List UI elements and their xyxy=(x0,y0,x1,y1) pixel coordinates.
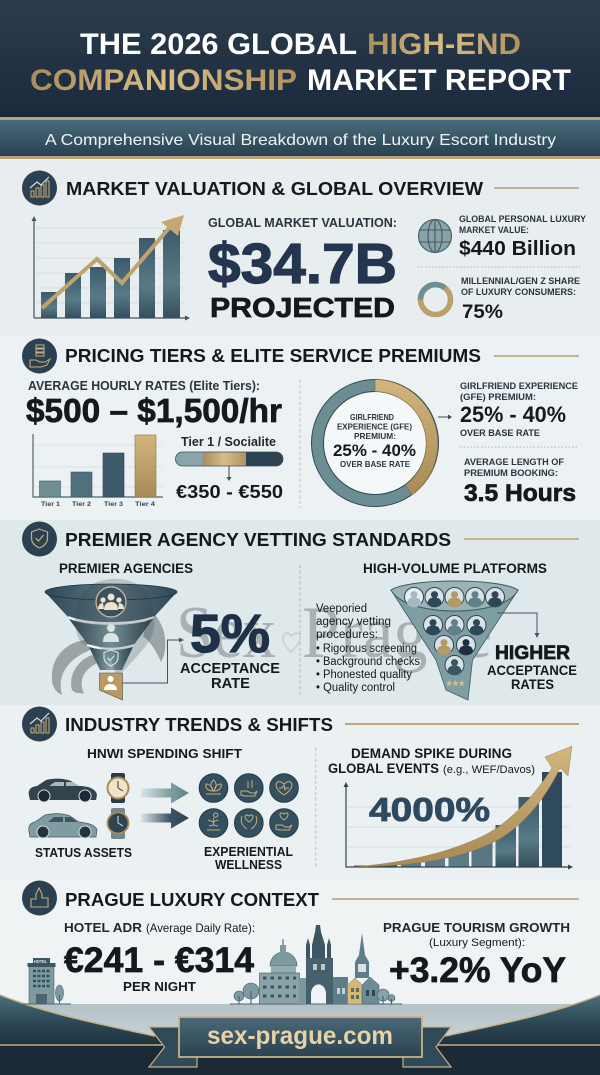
stat: 5% acceptance: 5% xyxy=(190,604,270,664)
label: experiential wellness xyxy=(204,845,293,872)
connector: funnel to 5 percent xyxy=(122,638,184,683)
stat: booking length xyxy=(464,457,576,507)
stat: booking length: 3.5 Hours xyxy=(464,480,576,507)
panel: market valuation xyxy=(22,170,587,323)
stat: global market valuation xyxy=(208,216,397,323)
heading: demand spike xyxy=(328,746,535,776)
icon: hotel: HOTEL xyxy=(34,959,47,964)
heading: PRICING TIERS & ELITE SERVICE PREMIUMS xyxy=(65,345,481,366)
bar chart: tiers xyxy=(33,434,163,508)
stat: global market valuation: PROJECTED xyxy=(210,292,395,323)
icon: growth chart xyxy=(22,170,57,206)
donut chart: GFE premium: PREMIUM: xyxy=(354,431,396,441)
stat: hotel ADR xyxy=(64,921,255,994)
stat: higher acceptance xyxy=(487,643,577,692)
icon: hotel xyxy=(23,958,71,1004)
wellness icons xyxy=(199,774,298,837)
stat: personal luxury market: MARKET VALUE: xyxy=(459,225,529,235)
icon: dark watch xyxy=(108,808,128,839)
stat: personal luxury market: $440 Billion xyxy=(459,238,576,260)
arrow: to wellness, navy xyxy=(141,808,189,828)
heading: MARKET VALUATION & GLOBAL OVERVIEW xyxy=(66,178,484,199)
bar chart: tiers: Tier 3 xyxy=(104,501,123,508)
stat: millennial share: OF LUXURY CONSUMERS: xyxy=(461,287,576,297)
icon: gold watch xyxy=(108,773,128,803)
stat: hotel ADR: PER NIGHT xyxy=(123,979,196,994)
stat: hotel ADR: (Average Daily Rate): xyxy=(146,921,255,935)
title: COMPANIONSHIP xyxy=(30,64,297,97)
stat: booking length: PREMIUM BOOKING: xyxy=(464,468,558,479)
heading: PREMIER AGENCY VETTING STANDARDS xyxy=(65,529,451,550)
vetting procedures list xyxy=(316,603,420,694)
subtitle: A Comprehensive Visual Breakdown of the Luxury Escort Industry xyxy=(45,132,556,149)
heading: demand spike: (e.g., WEF/Davos) xyxy=(443,764,535,776)
title: MARKET REPORT xyxy=(307,64,571,97)
illustration: prague skyline xyxy=(230,925,402,1004)
title: HIGH-END xyxy=(367,28,521,61)
stat: GFE premium: 25% - 40% xyxy=(460,402,566,427)
stat: tourism growth: (Luxury Segment): xyxy=(429,937,525,949)
footer xyxy=(0,995,600,1075)
stat: higher acceptance: ACCEPTANCE xyxy=(487,662,577,678)
mane shadow over funnel xyxy=(75,579,155,680)
arrow: growth xyxy=(42,215,184,308)
watermark: Prague xyxy=(302,592,492,674)
bar chart: market growth xyxy=(32,215,190,320)
title xyxy=(30,28,571,97)
icon: city xyxy=(22,880,57,916)
stat: tourism growth xyxy=(383,920,570,990)
icon: person xyxy=(103,624,119,642)
stat: booking length: AVERAGE LENGTH OF xyxy=(464,457,564,468)
stat: GFE premium: (GFE) PREMIUM: xyxy=(460,392,536,403)
heading: PRAGUE LUXURY CONTEXT xyxy=(65,889,320,910)
stat: millennial share: 75% xyxy=(462,302,503,323)
stat: millennial share xyxy=(461,276,580,323)
tier 1 range bar: Tier 1 / Socialite xyxy=(181,434,276,449)
chart: demand spike xyxy=(344,746,573,870)
avatars xyxy=(404,588,504,675)
stat: personal luxury market xyxy=(459,214,587,260)
watermark: Sex xyxy=(176,592,276,674)
stat: GFE premium: OVER BASE RATE xyxy=(460,428,540,439)
vetting procedures list: agency vetting xyxy=(316,616,391,628)
stat: average hourly rates: AVERAGE HOURLY RATES (Elite Tiers): xyxy=(28,378,260,393)
tier 1 range bar: €350 - €550 xyxy=(176,482,283,502)
stat: tourism growth: PRAGUE TOURISM GROWTH xyxy=(383,920,570,935)
stat: 5% acceptance: ACCEPTANCE xyxy=(180,660,280,677)
stat: 5% acceptance: RATE xyxy=(211,675,250,692)
website url: sex-prague.com xyxy=(207,1022,393,1050)
stat: higher acceptance: RATES xyxy=(511,676,554,692)
stat: higher acceptance: HIGHER xyxy=(495,643,570,664)
icon: trend chart xyxy=(22,706,57,742)
heading: demand spike: GLOBAL EVENTS xyxy=(328,761,439,776)
bar chart: tiers: Tier 4 xyxy=(135,501,155,508)
donut chart: GFE premium: GIRLFRIEND xyxy=(350,412,394,422)
donut chart: GFE premium: 25% - 40% xyxy=(333,441,416,460)
stat: average hourly rates: $500 – $1,500/hr xyxy=(26,392,282,429)
icon: donut share xyxy=(420,284,450,314)
label: experiential wellness: EXPERIENTIAL xyxy=(204,845,293,859)
heading: INDUSTRY TRENDS & SHIFTS xyxy=(65,714,333,735)
bar chart: tiers: Tier 1 xyxy=(41,501,60,508)
panel: vetting standards xyxy=(22,522,579,700)
ribbon banner xyxy=(149,1017,451,1067)
vetting procedures list: • Background checks xyxy=(316,656,420,668)
donut chart: GFE premium xyxy=(312,380,438,506)
subheading: premier agencies: PREMIER AGENCIES xyxy=(59,561,193,576)
funnel: high-volume platforms: ★★★ xyxy=(446,679,466,688)
subheading: high-volume platforms: HIGH-VOLUME PLATFORMS xyxy=(363,561,547,576)
vetting procedures list: • Rigorous screening xyxy=(316,643,417,655)
stat: GFE premium xyxy=(460,381,578,439)
arrow: to wellness, teal xyxy=(141,782,189,804)
bar chart: tiers: Tier 2 xyxy=(72,501,91,508)
icon: shield check xyxy=(104,650,118,666)
icon: globe xyxy=(418,220,452,252)
panel: prague context xyxy=(0,880,600,1075)
panel: pricing tiers xyxy=(22,338,579,508)
panel: industry trends xyxy=(22,706,579,872)
stat: 4000%: 4000% xyxy=(369,791,490,828)
title: THE 2026 GLOBAL xyxy=(80,28,357,61)
vetting procedures list: procedures: xyxy=(316,629,378,641)
vetting procedures list: • Phonested quality xyxy=(316,669,412,681)
funnel: high-volume platforms xyxy=(391,581,518,700)
stat: 5% acceptance xyxy=(180,604,280,692)
funnel: premier agencies xyxy=(45,579,177,700)
donut chart: GFE premium: EXPERIENCE (GFE) xyxy=(337,422,412,432)
vetting procedures list: • Quality control xyxy=(316,682,395,694)
stat: hotel ADR: HOTEL ADR xyxy=(64,921,142,935)
icon: shield xyxy=(22,522,57,556)
connector: funnel to higher acceptance xyxy=(498,613,540,638)
stat: global market valuation: $34.7B xyxy=(208,232,397,296)
stat: tourism growth: +3.2% YoY xyxy=(389,951,566,990)
label: status assets: STATUS ASSETS xyxy=(35,846,132,860)
stat: personal luxury market: GLOBAL PERSONAL LUXURY xyxy=(459,214,587,224)
header banner xyxy=(0,0,600,159)
funnel tip: accepted xyxy=(100,673,122,700)
subheading: HNWI: HNWI SPENDING SHIFT xyxy=(87,746,242,761)
stat: GFE premium: GIRLFRIEND EXPERIENCE xyxy=(460,381,578,392)
icon: coins in hand xyxy=(22,338,57,374)
heading: demand spike: DEMAND SPIKE DURING xyxy=(351,746,512,761)
watermark xyxy=(52,592,492,695)
icon: light car xyxy=(29,814,97,838)
donut chart: GFE premium: OVER BASE RATE xyxy=(340,459,410,469)
vetting procedures list: Veeporied xyxy=(316,603,367,615)
icon: group of people xyxy=(96,587,126,617)
section backgrounds xyxy=(0,159,600,1005)
stat: hotel ADR: €241 - €314 xyxy=(64,941,255,980)
arrow: donut to GFE stat xyxy=(438,414,452,420)
label: experiential wellness: WELLNESS xyxy=(215,858,282,872)
stat: millennial share: MILLENNIAL/GEN Z SHARE xyxy=(461,276,580,286)
icon: dark car xyxy=(29,779,97,802)
arrow: demand curve xyxy=(354,746,572,867)
stat: global market valuation: GLOBAL MARKET VALUATION: xyxy=(208,216,397,230)
tier 1 range bar xyxy=(176,434,283,502)
